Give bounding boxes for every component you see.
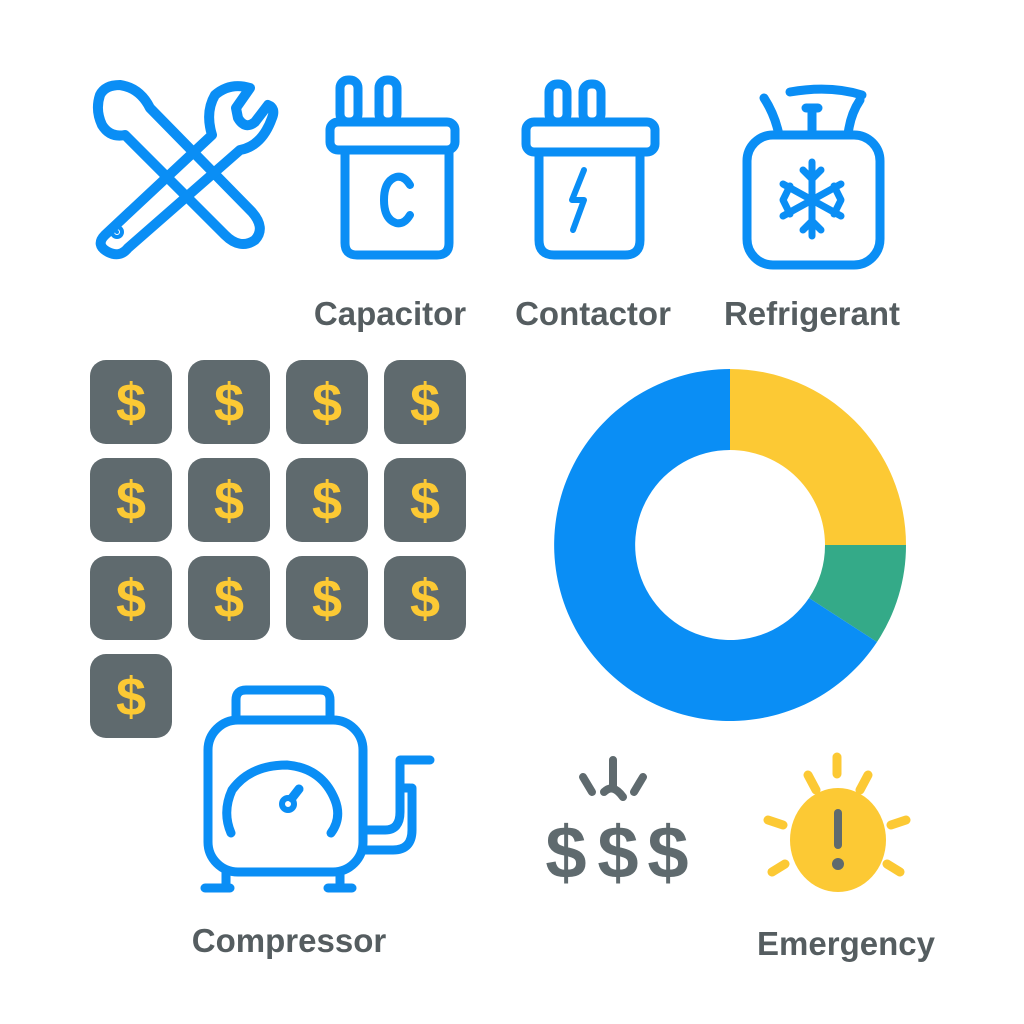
grid: dollar tiles: $ [116,667,146,727]
icon: rising costs: $ [647,811,689,894]
grid: dollar tiles: $ [312,373,342,433]
label: Emergency: Emergency [757,925,936,962]
icon: tools [98,85,273,254]
label: Contactor: Contactor [515,295,671,332]
grid: dollar tiles: $ [214,569,244,629]
label: Capacitor: Capacitor [314,295,466,332]
icon: rising costs: $ [597,811,639,894]
grid: dollar tiles: $ [312,471,342,531]
icon: rising costs: $ [545,811,587,894]
grid: dollar tiles: $ [410,471,440,531]
icon: emergency [768,757,906,892]
label: Refrigerant: Refrigerant [724,295,900,332]
chart: donut [554,369,906,721]
grid: dollar tiles: $ [116,471,146,531]
grid: dollar tiles: $ [312,569,342,629]
icon: capacitor [330,80,455,255]
icon: compressor [205,690,430,888]
icon: contactor [526,84,655,255]
grid: dollar tiles: $ [214,471,244,531]
icon: rising costs [545,760,689,894]
label: Compressor: Compressor [192,922,386,959]
grid: dollar tiles: $ [410,373,440,433]
icon: refrigerant tank [747,89,880,265]
grid: dollar tiles [90,360,466,738]
grid: dollar tiles: $ [116,569,146,629]
grid: dollar tiles: $ [410,569,440,629]
grid: dollar tiles: $ [214,373,244,433]
grid: dollar tiles: $ [116,373,146,433]
